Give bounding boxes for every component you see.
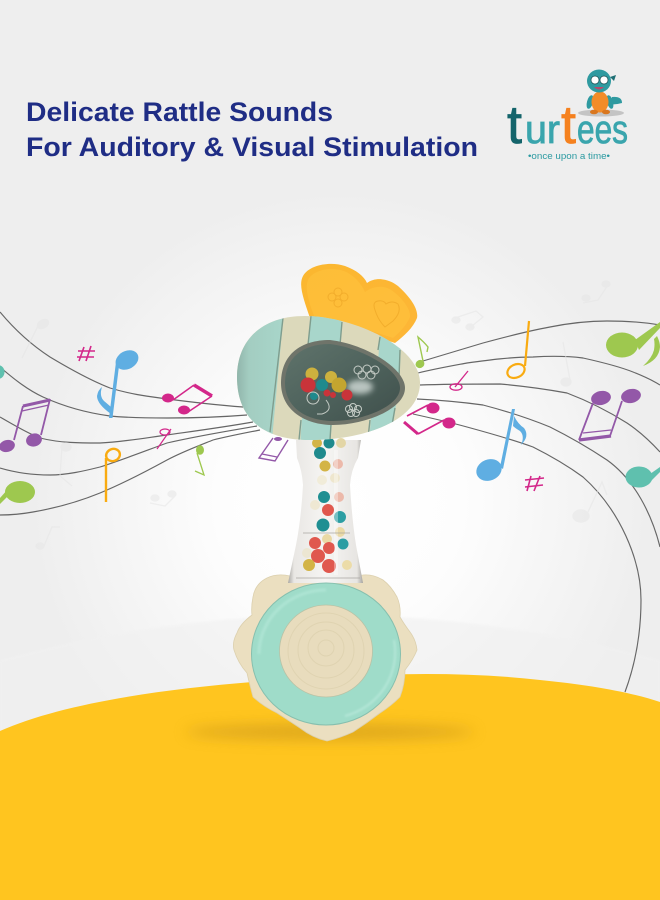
rattle: base flower teether — [233, 575, 417, 741]
music notes: right — [259, 321, 660, 491]
staff lines: left — [0, 312, 260, 515]
rattle: clear tube — [288, 440, 363, 583]
title — [26, 97, 478, 162]
logo: turtees — [507, 70, 628, 162]
note: blue eighth — [97, 346, 142, 418]
note: green head left — [0, 481, 35, 504]
faint background notes — [22, 281, 610, 549]
note: small magenta right — [450, 371, 468, 390]
note: purple beamed pair right — [579, 387, 642, 440]
logo wordmark: t — [561, 95, 576, 155]
note: small magenta — [157, 429, 171, 449]
note: teal head right — [626, 466, 660, 488]
note: blue eighth right — [473, 409, 526, 485]
rattle: heart teether — [301, 264, 417, 343]
title: For Auditory & Visual Stimulation — [26, 132, 478, 162]
note: magenta sharp right — [525, 476, 544, 491]
rattle: mint ring — [252, 583, 400, 725]
note: small green — [195, 445, 204, 475]
icon: turtle mascot — [578, 70, 624, 116]
floor shadow — [185, 724, 475, 740]
note: magenta sharp — [77, 346, 95, 361]
logo tagline: •once upon a time• — [528, 151, 610, 162]
staff lines: right — [413, 321, 660, 692]
window beads — [300, 368, 352, 400]
rattle: egg head — [237, 316, 420, 440]
rattle: tube beads — [296, 438, 360, 578]
note: magenta beamed pair right — [404, 402, 456, 434]
logo wordmark: ees — [577, 108, 628, 152]
note: purple small below rattle head — [259, 437, 288, 461]
note: orange open note right — [505, 321, 529, 381]
note: purple beamed pair — [0, 399, 50, 454]
product: rattle toy — [230, 264, 425, 741]
note: small green right — [414, 337, 428, 370]
note: orange open note left — [104, 447, 122, 502]
music notes: left — [0, 346, 212, 504]
yellow floor — [0, 674, 660, 900]
window flower charms — [307, 365, 379, 416]
logo wordmark: t — [507, 95, 522, 155]
title: Delicate Rattle Sounds — [26, 97, 333, 127]
note: teal head left edge — [0, 365, 4, 379]
note: green large right — [606, 322, 660, 366]
logo wordmark: ur — [525, 108, 560, 152]
note: magenta beamed pair — [162, 385, 212, 414]
rattle: egg window — [281, 340, 405, 425]
